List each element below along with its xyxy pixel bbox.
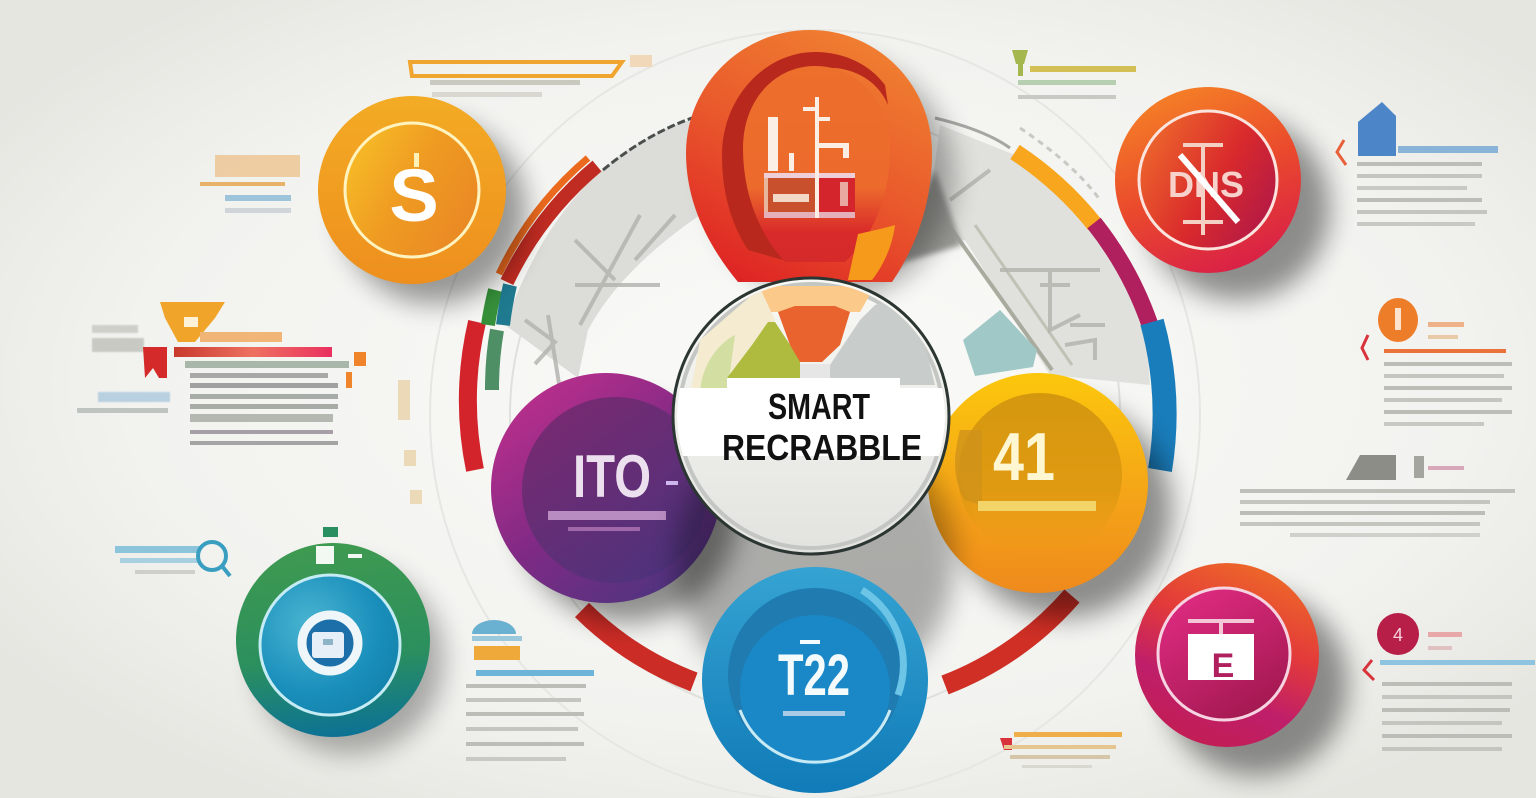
circle: green blue target (236, 527, 444, 754)
center circle: smart recrabble (670, 278, 960, 554)
circle: magenta box: E (1212, 647, 1234, 685)
text block: right lower wide (1240, 455, 1515, 537)
text block: left middle (77, 302, 366, 445)
center circle: smart recrabble: RECRABBLE (722, 427, 922, 468)
ring: gray sketch bands (505, 118, 1150, 385)
ring: colored arc segments (468, 152, 1165, 685)
text block: top right (1012, 50, 1136, 99)
circle: red crossed DNS: DNS (1168, 164, 1244, 205)
ring: faint guide circles (430, 30, 1200, 798)
text block: bottom center right (1000, 732, 1122, 768)
text block: bottom left of blue (466, 620, 594, 761)
text block: bottom right: 4 (1393, 625, 1403, 645)
circle: yellow 41 (928, 373, 1172, 618)
text block: right middle (1362, 298, 1512, 426)
circle: blue T22 (675, 420, 955, 793)
text block: top center-left (410, 55, 652, 97)
center gauge (670, 286, 960, 456)
text block: bottom right (1364, 613, 1535, 751)
ring sketches: faint line drawings (525, 170, 1105, 390)
pin factory icon (764, 97, 855, 218)
label: left of orange (200, 155, 300, 213)
circle: orange dollar (318, 96, 526, 304)
circle: blue T22: T22 (778, 643, 850, 708)
circle: red crossed DNS (1115, 87, 1330, 300)
circle: top red factory pin (686, 30, 954, 300)
circle: purple ITO (491, 373, 738, 622)
center title: SMART (768, 386, 870, 427)
teal box right of center (963, 310, 1037, 376)
circle: magenta box (1135, 563, 1348, 776)
circle: purple ITO: ITO (573, 443, 651, 510)
circle: yellow 41: 41 (993, 419, 1055, 495)
small tick marks left of ring (398, 380, 422, 504)
circle: orange dollar: S (389, 154, 439, 237)
text block: right upper (1337, 102, 1498, 226)
text block: left lower label (115, 542, 230, 576)
pin inner crescent (722, 52, 888, 262)
